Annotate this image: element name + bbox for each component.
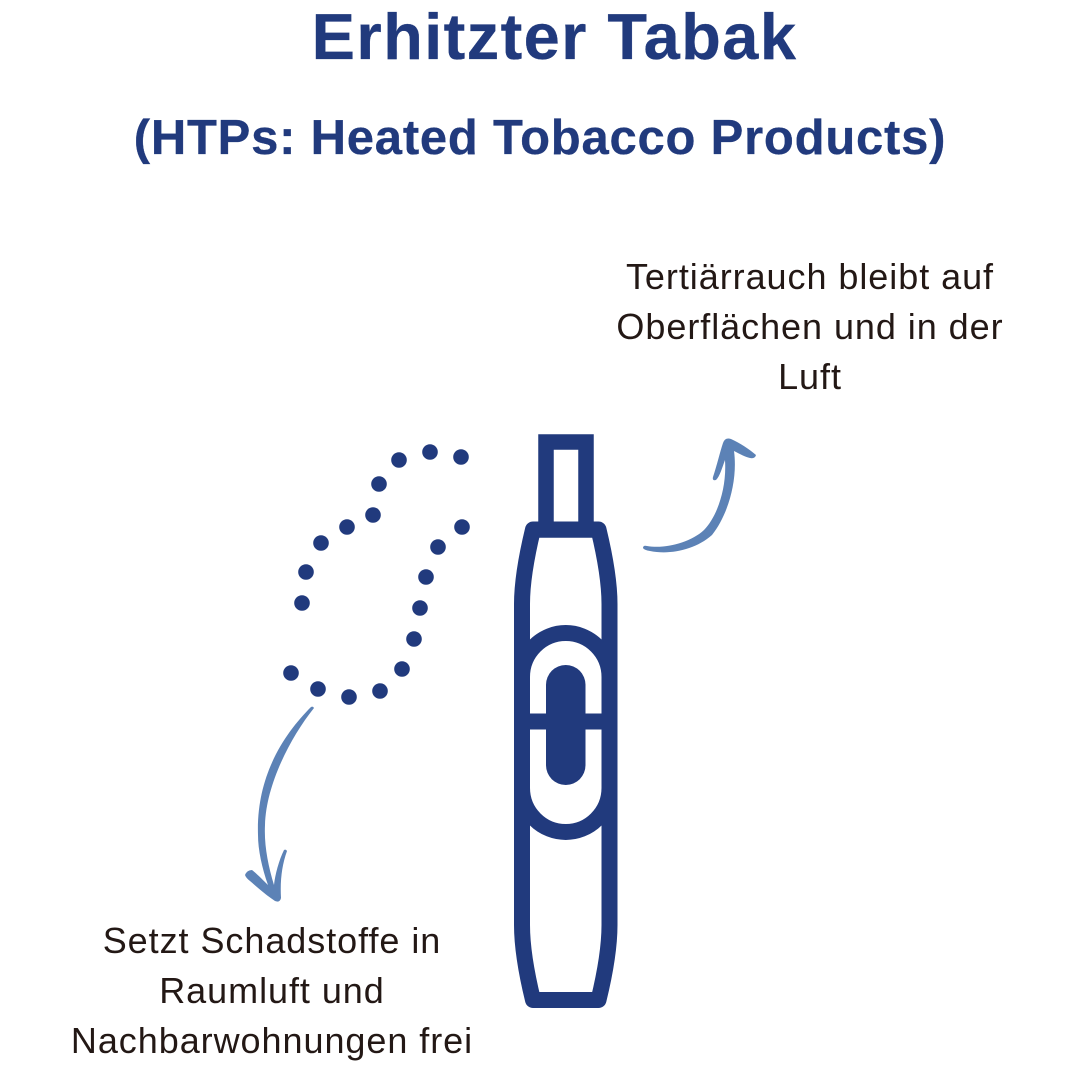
device window [522,633,610,832]
device mouthpiece [546,442,586,530]
arrow: down to pollutants text [245,707,314,902]
arrow: up to tertiary smoke text [643,438,756,552]
text: tertiary smoke [616,256,1004,397]
text: tertiary smoke: Tertiärrauch bleibt auf [626,256,994,297]
icon: heated tobacco device [522,442,610,1000]
text: tertiary smoke: Luft [778,356,842,397]
text: pollutants [71,920,473,1061]
device body [522,530,610,1000]
text: pollutants: Nachbarwohnungen frei [71,1020,473,1061]
device button [546,665,586,785]
text: pollutants: Setzt Schadstoffe in [103,920,441,961]
text: pollutants: Raumluft und [159,970,385,1011]
device crossbar [522,714,610,730]
text: tertiary smoke: Oberflächen und in der [616,306,1004,347]
subtitle: (HTPs: Heated Tobacco Products) [134,111,946,165]
dotted smoke trail [283,444,470,705]
title: Erhitzter Tabak [312,0,797,73]
